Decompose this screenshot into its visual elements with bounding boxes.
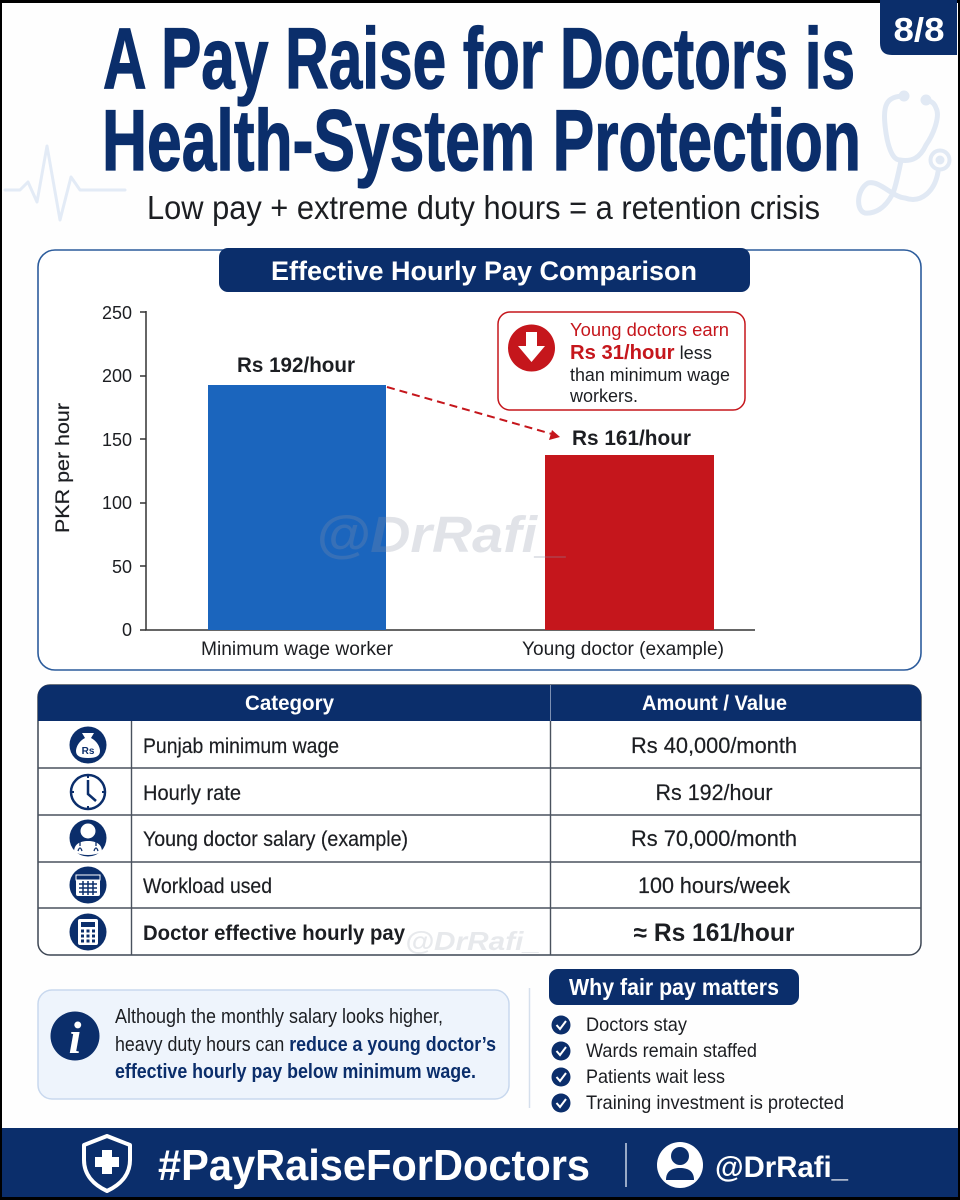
icon: doctor [70,820,106,856]
row: young doctor salary: Rs 70,000/month [631,826,797,851]
y axis labels: 250 [102,303,132,323]
checklist: Wards remain staffed [586,1040,757,1062]
panel: info note [38,990,509,1099]
heading: chart title [219,248,750,292]
table header: Category [245,692,334,715]
heading: Why fair pay matters [569,974,779,1000]
row: hourly rate: Rs 192/hour [656,780,772,805]
panel: why fair pay matters [549,969,844,1114]
panel: data table [38,685,921,956]
y axis labels [102,303,132,640]
watermark small: @DrRafi_ [405,926,540,956]
table header [38,685,921,721]
page badge: 8/8 [894,11,944,48]
row: hourly rate [71,775,772,809]
icon: clock [71,775,105,809]
icon: info [50,1012,100,1063]
panel: info note: heavy duty hours can reduce a young doctor’s [115,1034,496,1056]
table header: Amount / Value [642,692,787,715]
subtitle: Low pay + extreme duty hours = a retention crisis [147,189,820,226]
row: Punjab minimum wage [70,726,797,764]
icon: profile [657,1142,703,1188]
x axis labels: Minimum wage worker [201,639,394,660]
title [102,11,861,189]
row: Punjab minimum wage: Punjab minimum wage [143,735,339,758]
hashtag: #PayRaiseForDoctors [158,1141,590,1190]
row: workload used [70,866,791,904]
callout: pay gap [498,312,745,410]
panel: info note: effective hourly pay below minimum wage. [115,1061,476,1083]
icon: shield with cross [84,1136,130,1191]
icon: info: i [69,1012,82,1063]
page badge [880,0,957,55]
footer banner [2,1128,958,1197]
panel: hourly pay comparison chart [38,248,921,670]
y axis labels: 0 [122,620,132,640]
value label: minimum wage: Rs 192/hour [237,354,355,377]
icon: money bag: Rs [82,746,95,757]
y axis labels: 100 [102,493,132,513]
row: workload used: Workload used [143,875,272,898]
icon: calendar [70,866,106,904]
row: doctor effective hourly pay [70,914,795,950]
row: young doctor salary: Young doctor salary (example) [143,828,408,851]
icon: decorative heartbeat line [5,146,125,220]
bar: minimum wage worker [208,385,386,630]
bar chart [53,303,755,660]
value label: young doctor: Rs 161/hour [572,427,691,450]
checklist: Training investment is protected [586,1092,844,1114]
checklist [552,1014,844,1114]
row: doctor effective hourly pay: ≈ Rs 161/hour [634,919,795,947]
icon: down arrow [508,324,555,372]
heading: chart title: Effective Hourly Pay Comparison [271,256,697,286]
arrow: drop between bars [387,387,560,440]
callout: pay gap: Young doctors earn [570,320,729,340]
row: young doctor salary [70,820,797,856]
checklist: Patients wait less [586,1066,725,1088]
callout: pay gap: than minimum wage [570,365,730,385]
axes [140,311,755,630]
y axis labels: 200 [102,366,132,386]
row: doctor effective hourly pay: Doctor effective hourly pay [143,922,405,945]
y axis labels: 150 [102,430,132,450]
bar: young doctor [545,455,714,630]
y axis title: PKR per hour [53,402,74,533]
handle: @DrRafi_ [715,1151,848,1184]
x axis labels [201,639,724,660]
row: Punjab minimum wage: Rs 40,000/month [631,733,797,758]
checklist: Doctors stay [586,1014,687,1036]
icon: calculator [70,914,106,950]
row: hourly rate: Hourly rate [143,782,241,805]
row: workload used: 100 hours/week [638,873,791,898]
x axis labels: Young doctor (example) [522,639,724,660]
panel: info note: Although the monthly salary looks higher, [115,1006,443,1028]
callout: pay gap: workers. [569,386,638,406]
callout: pay gap: Rs 31/hour less [570,342,712,364]
icon: decorative stethoscope [859,93,950,213]
y axis labels: 50 [112,557,132,577]
heading [549,969,799,1005]
watermark: @DrRafi_ [316,506,568,563]
icon: money bag [70,726,106,764]
